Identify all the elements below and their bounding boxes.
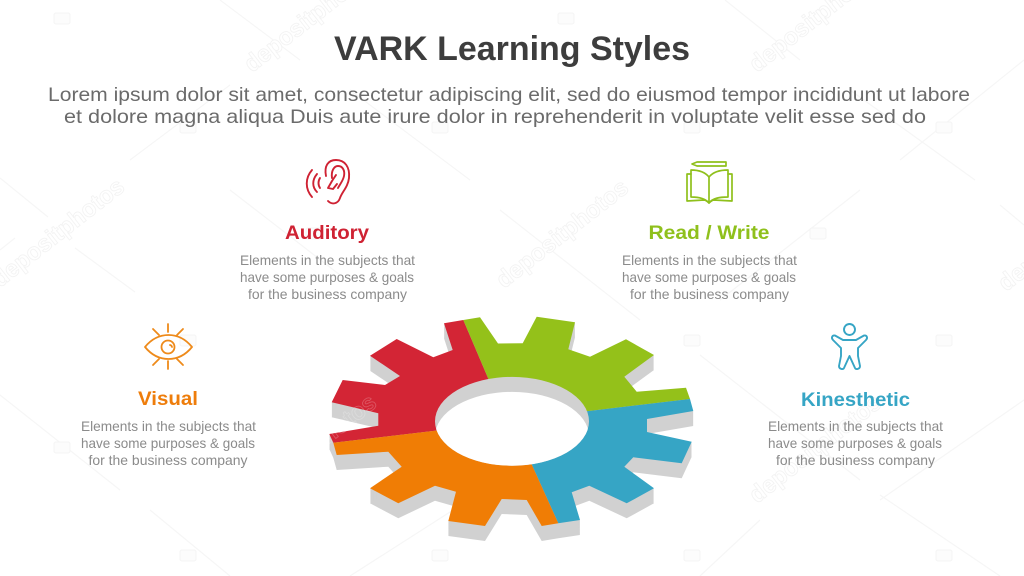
text: Read / Write description: Elements in the subjects that (622, 252, 797, 268)
text: Read / Write description: for the business company (630, 286, 789, 302)
gear segment: green (463, 317, 690, 421)
icon: ear (307, 160, 349, 203)
watermark background: depositphotos (744, 389, 887, 509)
gear diagram (329, 317, 693, 541)
text: Read / Write description: have some purposes & goals (622, 269, 796, 285)
text: Visual description: Elements in the subjects that (81, 418, 256, 434)
text: Visual description (81, 418, 256, 468)
heading: Visual: Visual (138, 388, 198, 410)
gear segment: orange (333, 421, 558, 526)
subtitle text (48, 84, 970, 128)
gear segment: red (329, 320, 512, 443)
text: Kinesthetic description: for the business company (776, 452, 935, 468)
text: Auditory description: for the business company (248, 286, 407, 302)
text: Auditory description (240, 252, 415, 302)
icon: eye (145, 324, 192, 369)
icon: book and pencil (687, 162, 732, 203)
text: Kinesthetic description: have some purposes & goals (768, 435, 942, 451)
watermark background: depositphotos (491, 174, 634, 294)
heading: Read / Write: Read / Write (648, 222, 770, 244)
heading: Kinesthetic: Kinesthetic (801, 389, 910, 411)
text: Auditory description: have some purposes & goals (240, 269, 414, 285)
text: Kinesthetic description (768, 418, 943, 468)
gear segment: blue (512, 399, 693, 523)
title: VARK Learning Styles (334, 30, 690, 68)
text: Kinesthetic description: Elements in the subjects that (768, 418, 943, 434)
gear centre hole (435, 376, 589, 466)
text: Auditory description: Elements in the subjects that (240, 252, 415, 268)
heading: Auditory: Auditory (285, 222, 369, 244)
text: Read / Write description (622, 252, 797, 302)
watermark over gear: depositphotos (239, 389, 382, 509)
icon: person (832, 324, 867, 369)
subtitle text: et dolore magna aliqua Duis aute irure dolor in reprehenderit in voluptate velit esse sed do (64, 106, 926, 128)
text: Visual description: for the business company (88, 452, 248, 468)
subtitle text: Lorem ipsum dolor sit amet, consectetur adipiscing elit, sed do eiusmod tempor incididunt ut labore (48, 84, 970, 106)
text: Visual description: have some purposes & goals (81, 435, 255, 451)
